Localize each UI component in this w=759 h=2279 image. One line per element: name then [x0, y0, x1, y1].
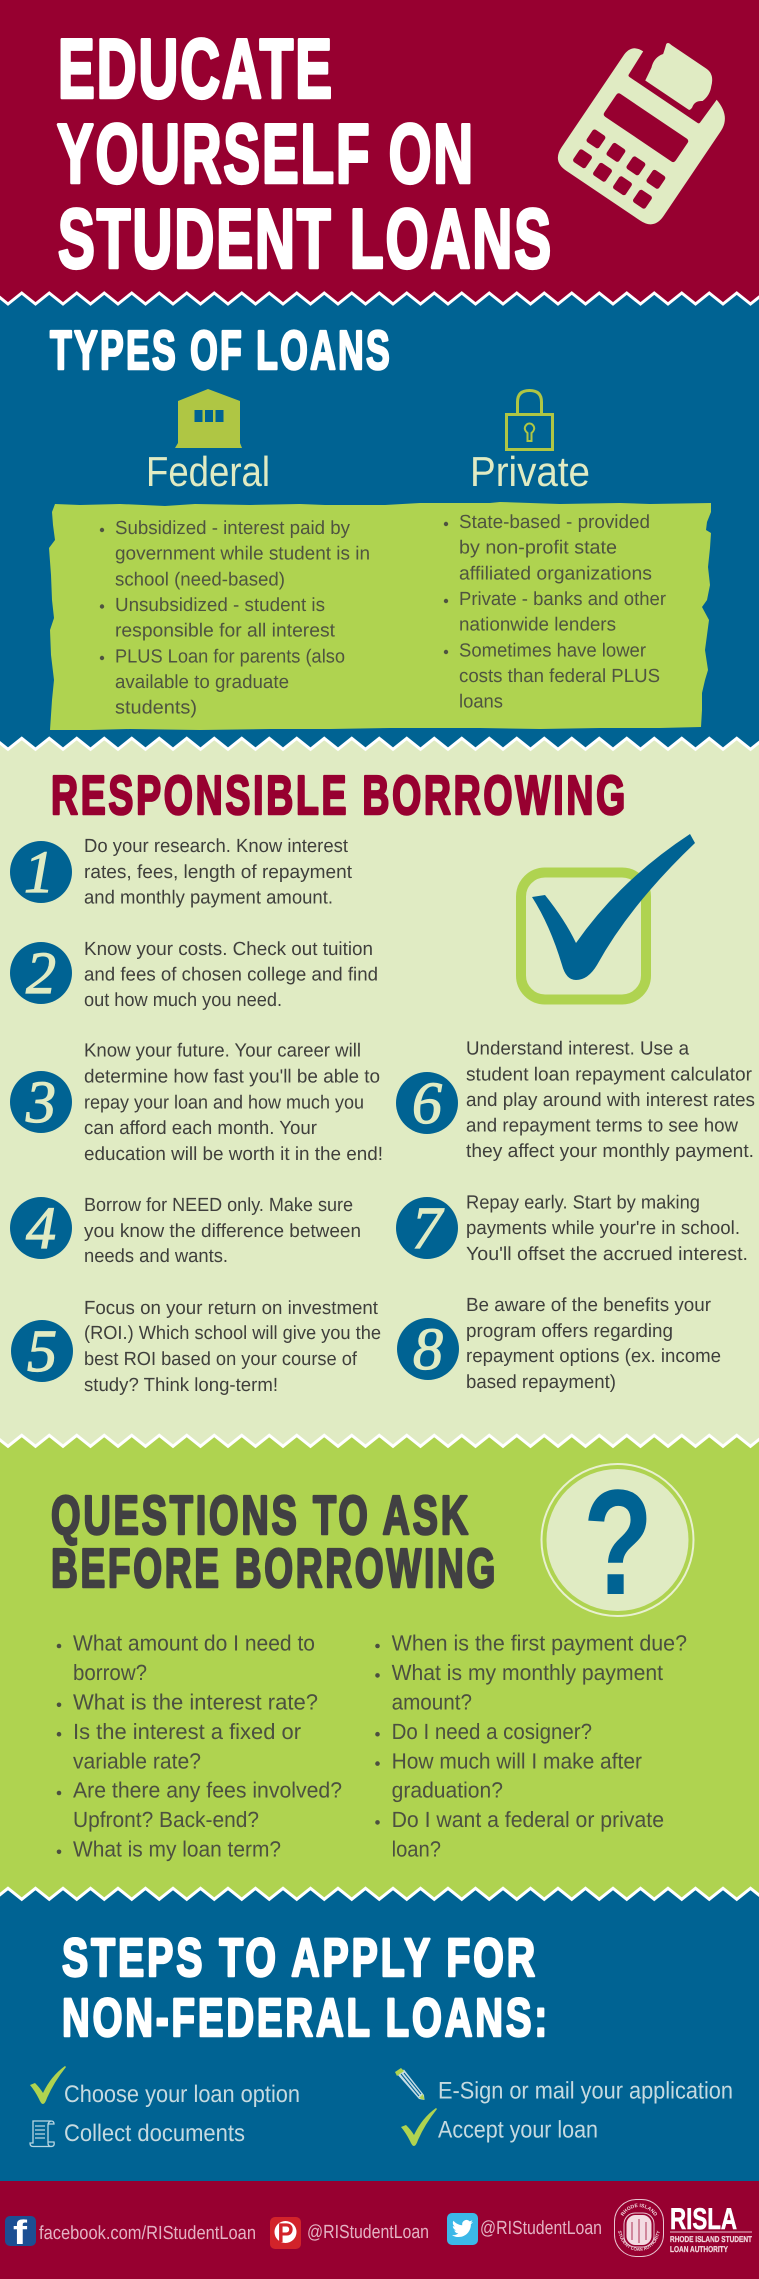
icon: check two — [401, 2108, 437, 2146]
list: questions right: When is the first payment due? — [392, 1631, 687, 1656]
item 8: based repayment) — [466, 1372, 616, 1393]
item 8: Be aware of the benefits your — [466, 1295, 712, 1316]
item 7: 7 — [412, 1195, 445, 1261]
icon: document scroll — [30, 2121, 54, 2146]
list: federal loans: PLUS Loan for parents (also — [115, 646, 345, 667]
list: private loans: affiliated organizations — [459, 563, 652, 584]
item 4: 4 — [26, 1195, 56, 1261]
item 5: Focus on your return on investment — [84, 1298, 379, 1319]
step: accept your loan: Accept your loan — [438, 2117, 598, 2144]
item 7: You'll offset the accrued interest. — [466, 1244, 748, 1265]
item 8: 8 — [413, 1316, 443, 1382]
item 5: best ROI based on your course of — [84, 1349, 358, 1370]
item 8 — [397, 1295, 721, 1393]
list: questions left: Are there any fees involved? — [73, 1778, 342, 1803]
item 5 — [11, 1298, 381, 1396]
icon: facebook: f — [13, 2214, 28, 2252]
item 3: determine how fast you'll be able to — [84, 1067, 380, 1088]
icon: checkbox with tick — [521, 834, 695, 1000]
icon: check one — [30, 2066, 66, 2104]
panel: responsible borrowing — [0, 738, 759, 1448]
list: private loans: by non-profit state — [459, 538, 617, 559]
heading: questions to ask before borrowing: QUESTIONS TO ASK — [51, 1484, 471, 1546]
title — [57, 21, 553, 285]
item 7 — [396, 1193, 748, 1265]
list: federal loans — [100, 518, 370, 719]
item 6: student loan repayment calculator — [466, 1065, 753, 1086]
list: federal loans: available to graduate — [115, 672, 289, 693]
panel: steps to apply — [0, 1888, 759, 2181]
title: YOURSELF ON — [57, 106, 475, 200]
item 2: Know your costs. Check out tuition — [84, 939, 373, 960]
logo: RISLA wordmark — [670, 2203, 753, 2254]
icon: calculator — [552, 26, 745, 230]
list: federal loans: school (need-based) — [115, 569, 285, 590]
icon: padlock — [506, 390, 552, 450]
logo: RISLA seal: STUDENT LOAN AUTHORITY — [618, 2230, 660, 2251]
list: private loans: State-based - provided — [459, 512, 650, 533]
icon: question mark badge: ? — [583, 1458, 653, 1626]
item 6: and repayment terms to see how — [466, 1116, 738, 1137]
logo: RISLA wordmark: LOAN AUTHORITY — [670, 2244, 728, 2254]
list: questions right: amount? — [392, 1690, 472, 1714]
heading: steps to apply: STEPS TO APPLY FOR — [62, 1928, 538, 1988]
step: e-sign or mail: E-Sign or mail your application — [438, 2078, 733, 2105]
icon: question mark badge — [542, 1458, 694, 1626]
heading: questions to ask before borrowing — [51, 1484, 498, 1599]
item 6: they affect your monthly payment. — [466, 1141, 754, 1162]
item 2: out how much you need. — [84, 990, 282, 1011]
twitter handle: @RIStudentLoan — [480, 2218, 602, 2239]
list: questions right: What is my monthly payment — [392, 1660, 663, 1685]
item 8: program offers regarding — [466, 1321, 673, 1342]
list: questions right: How much will I make after — [392, 1748, 642, 1773]
item 6: and play around with interest rates — [466, 1090, 755, 1111]
pinterest handle: @RIStudentLoan — [307, 2222, 429, 2243]
list: questions left: Is the interest a fixed or — [73, 1719, 301, 1744]
item 2: and fees of chosen college and find — [84, 965, 378, 986]
list: questions left: What is my loan term? — [73, 1836, 281, 1862]
list: federal loans: government while student is in — [115, 544, 370, 565]
item 3: Know your future. Your career will — [84, 1041, 361, 1062]
item 1 — [10, 836, 353, 909]
list: federal loans: Unsubsidized - student is — [115, 595, 325, 616]
item 2: 2 — [26, 940, 56, 1006]
item 5: (ROI.) Which school will give you the — [84, 1323, 381, 1344]
icon: pinterest — [270, 2217, 301, 2249]
list: federal loans: students) — [115, 698, 197, 719]
label: federal: Federal — [146, 448, 270, 495]
item 3: 3 — [25, 1069, 56, 1135]
list: questions left: What is the interest rate? — [73, 1690, 318, 1714]
item 4 — [10, 1195, 361, 1267]
item 3: education will be worth it in the end! — [84, 1144, 383, 1165]
icon: pinterest: P — [278, 2218, 294, 2248]
logo: RISLA wordmark: RISLA — [670, 2203, 737, 2236]
list: private loans: Private - banks and other — [459, 589, 667, 610]
list: questions left — [57, 1631, 342, 1862]
item 8: repayment options (ex. income — [466, 1346, 721, 1367]
list: questions left: variable rate? — [73, 1748, 201, 1773]
item 6 — [396, 1039, 755, 1162]
list: federal loans: Subsidized - interest paid by — [115, 518, 350, 539]
item 3: repay your loan and how much you — [84, 1093, 364, 1114]
item 7: payments while your're in school. — [466, 1218, 740, 1239]
list: private loans: costs than federal PLUS — [459, 666, 660, 687]
item 5: study? Think long-term! — [84, 1375, 278, 1396]
item 6: 6 — [412, 1070, 442, 1136]
item 1: and monthly payment amount. — [84, 888, 333, 909]
icon: federal building — [175, 389, 242, 448]
item 2 — [10, 939, 378, 1011]
panel: footer — [5, 2199, 753, 2257]
list: questions left: Upfront? Back-end? — [73, 1807, 259, 1832]
panel: loan comparison box — [49, 502, 711, 730]
title: EDUCATE — [58, 21, 334, 115]
facebook address: facebook.com/RIStudentLoan — [39, 2223, 256, 2244]
heading: steps to apply: NON-FEDERAL LOANS: — [62, 1988, 550, 2048]
heading: types of loans: TYPES OF LOANS — [50, 319, 392, 381]
list: questions right: loan? — [392, 1836, 441, 1862]
item 3: can afford each month. Your — [84, 1118, 318, 1139]
heading: questions to ask before borrowing: BEFORE BORROWING — [51, 1537, 498, 1599]
step: collect documents: Collect documents — [64, 2120, 245, 2147]
item 3 — [10, 1041, 383, 1165]
list: questions right — [375, 1631, 687, 1862]
list: private loans: loans — [459, 692, 503, 713]
list: private loans: Sometimes have lower — [459, 640, 647, 661]
list: federal loans: responsible for all interest — [115, 621, 336, 642]
label: private: Private — [470, 448, 590, 495]
icon: pencil — [395, 2068, 424, 2100]
list: private loans: nationwide lenders — [459, 615, 616, 636]
item 7: Repay early. Start by making — [466, 1193, 700, 1214]
list: questions left: borrow? — [73, 1660, 147, 1685]
item 5: 5 — [27, 1318, 57, 1384]
icon: facebook — [5, 2214, 36, 2252]
list: questions right: graduation? — [392, 1778, 503, 1803]
item 1: rates, fees, length of repayment — [84, 862, 353, 883]
list: private loans — [444, 512, 667, 713]
item 4: you know the difference between — [84, 1221, 361, 1242]
icon: twitter — [447, 2213, 478, 2245]
heading: steps to apply — [62, 1928, 550, 2048]
item 6: Understand interest. Use a — [466, 1039, 689, 1060]
logo: RISLA seal: RHODE ISLAND — [620, 2204, 657, 2216]
item 1: Do your research. Know interest — [84, 836, 349, 857]
step: choose your loan option: Choose your loan option — [64, 2081, 300, 2108]
panel: header — [0, 0, 759, 306]
panel: questions to ask — [0, 1435, 759, 1901]
item 1: 1 — [24, 839, 54, 905]
item 4: Borrow for NEED only. Make sure — [84, 1195, 353, 1216]
list: questions right: Do I need a cosigner? — [392, 1719, 592, 1744]
panel: types of loans — [0, 293, 759, 750]
item 4: needs and wants. — [84, 1246, 228, 1267]
list: questions right: Do I want a federal or private — [392, 1807, 664, 1832]
logo: RISLA seal — [614, 2199, 664, 2257]
list: questions left: What amount do I need to — [73, 1631, 315, 1656]
